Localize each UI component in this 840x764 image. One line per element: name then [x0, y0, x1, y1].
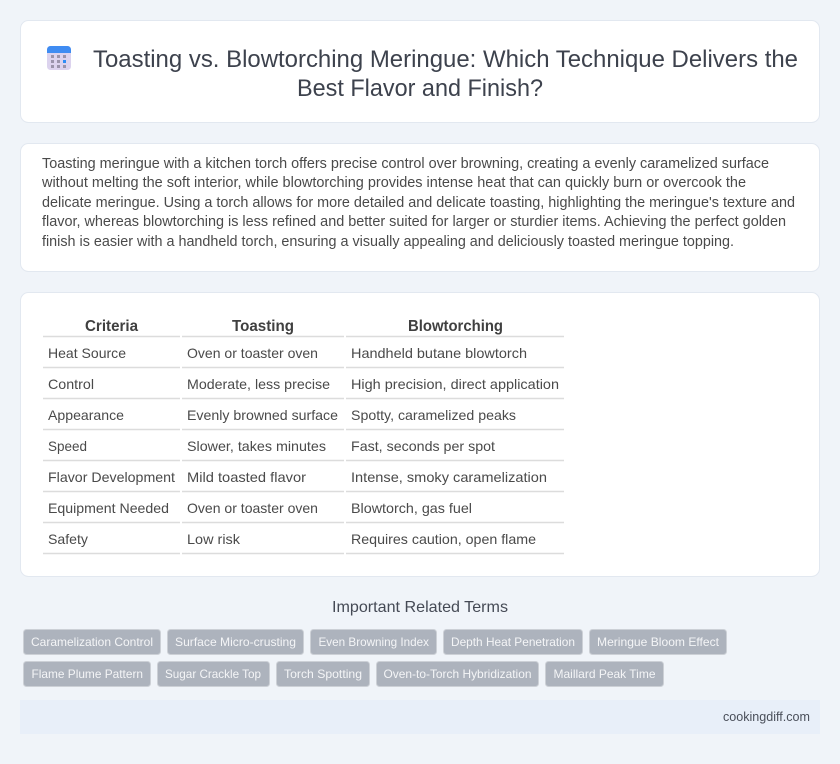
tag: Sugar Crackle Top: [165, 667, 261, 681]
tag: Maillard Peak Time: [554, 667, 656, 681]
table row: safety: Requires caution, open flame: [351, 531, 536, 547]
text block: introduction: [41, 156, 795, 250]
table row: equipment needed: Blowtorch, gas fuel: [351, 500, 472, 516]
table row: flavor development: Intense, smoky caramelization: [351, 469, 547, 485]
tag: [546, 662, 664, 686]
tag: Torch Spotting: [284, 667, 362, 681]
tag list: related terms: [24, 630, 726, 686]
table row: heat source: Handheld butane blowtorch: [351, 345, 527, 361]
title: [93, 46, 798, 102]
table row: appearance: Spotty, caramelized peaks: [351, 407, 516, 423]
heading: important related terms: Important Related Terms: [332, 599, 508, 616]
text block: introduction: finish is easier with a handheld torch, ensuring a visually appealing and deliciously toasted meringue topping.: [42, 234, 734, 250]
table row: flavor development: Flavor Development: [48, 469, 175, 485]
title: Toasting vs. Blowtorching Meringue: Which Technique Delivers the: [93, 46, 798, 73]
text block: introduction: without melting the soft interior, while blowtorching provides intense heat that can quickly burn or overcook the: [41, 175, 746, 191]
table row: control: Control: [48, 376, 94, 392]
tag: [276, 662, 370, 686]
table header: Criteria: [85, 318, 138, 335]
text block: introduction: delicate meringue. Using a torch allows for more detailed and delicate toasting, highlighting the meringue's texture and: [42, 195, 795, 211]
table header: [85, 318, 503, 335]
table header: Toasting: [232, 318, 294, 335]
table row: equipment needed: Equipment Needed: [48, 500, 169, 516]
footer: [20, 700, 820, 734]
table row: speed: Speed: [48, 438, 87, 454]
tag: [24, 662, 150, 686]
table row: safety: [48, 531, 536, 547]
table row: appearance: Evenly browned surface: [187, 407, 338, 423]
table row: speed: Slower, takes minutes: [187, 438, 326, 454]
table row: appearance: [48, 407, 516, 423]
tag: Oven-to-Torch Hybridization: [384, 667, 532, 681]
table row: speed: Fast, seconds per spot: [351, 438, 495, 454]
footer credit: cookingdiff.com: [723, 710, 810, 724]
table row: speed: [48, 438, 495, 454]
tag: [444, 630, 582, 654]
text block: introduction: Toasting meringue with a kitchen torch offers precise control over browning, creating a evenly caramelized surface: [42, 156, 769, 172]
tag: [168, 630, 304, 654]
table row: flavor development: [48, 469, 547, 485]
tag: [310, 630, 436, 654]
table row: safety: Low risk: [187, 531, 241, 547]
table row: control: [48, 376, 559, 392]
tag: [24, 630, 160, 654]
icon: calendar: [47, 46, 71, 70]
tag: [590, 630, 726, 654]
panel: comparison table: [20, 292, 820, 576]
table row: heat source: Oven or toaster oven: [187, 345, 318, 361]
panel: header: [20, 20, 820, 122]
table row: flavor development: Mild toasted flavor: [187, 469, 306, 485]
table row: control: Moderate, less precise: [187, 376, 330, 392]
tag: Meringue Bloom Effect: [597, 635, 720, 649]
tag: [376, 662, 538, 686]
table row: control: High precision, direct application: [351, 376, 559, 392]
tag: Surface Micro-crusting: [175, 635, 296, 649]
panel: intro text: [20, 144, 820, 272]
text block: introduction: flavor, whereas blowtorching is less refined and better suited for larger or sturdier items. Achieving the perfect golden: [42, 214, 786, 230]
table row: equipment needed: Oven or toaster oven: [187, 500, 318, 516]
table row: equipment needed: [48, 500, 472, 516]
tag: Even Browning Index: [318, 635, 429, 649]
tag: [158, 662, 270, 686]
table header: Blowtorching: [408, 318, 503, 335]
table row: safety: Safety: [48, 531, 88, 547]
tag: Depth Heat Penetration: [451, 635, 575, 649]
tag: Flame Plume Pattern: [32, 667, 143, 681]
tag: Caramelization Control: [31, 635, 153, 649]
table row: heat source: [48, 345, 527, 361]
table row: appearance: Appearance: [48, 407, 124, 423]
table row: heat source: Heat Source: [48, 345, 126, 361]
title: Best Flavor and Finish?: [297, 75, 543, 102]
